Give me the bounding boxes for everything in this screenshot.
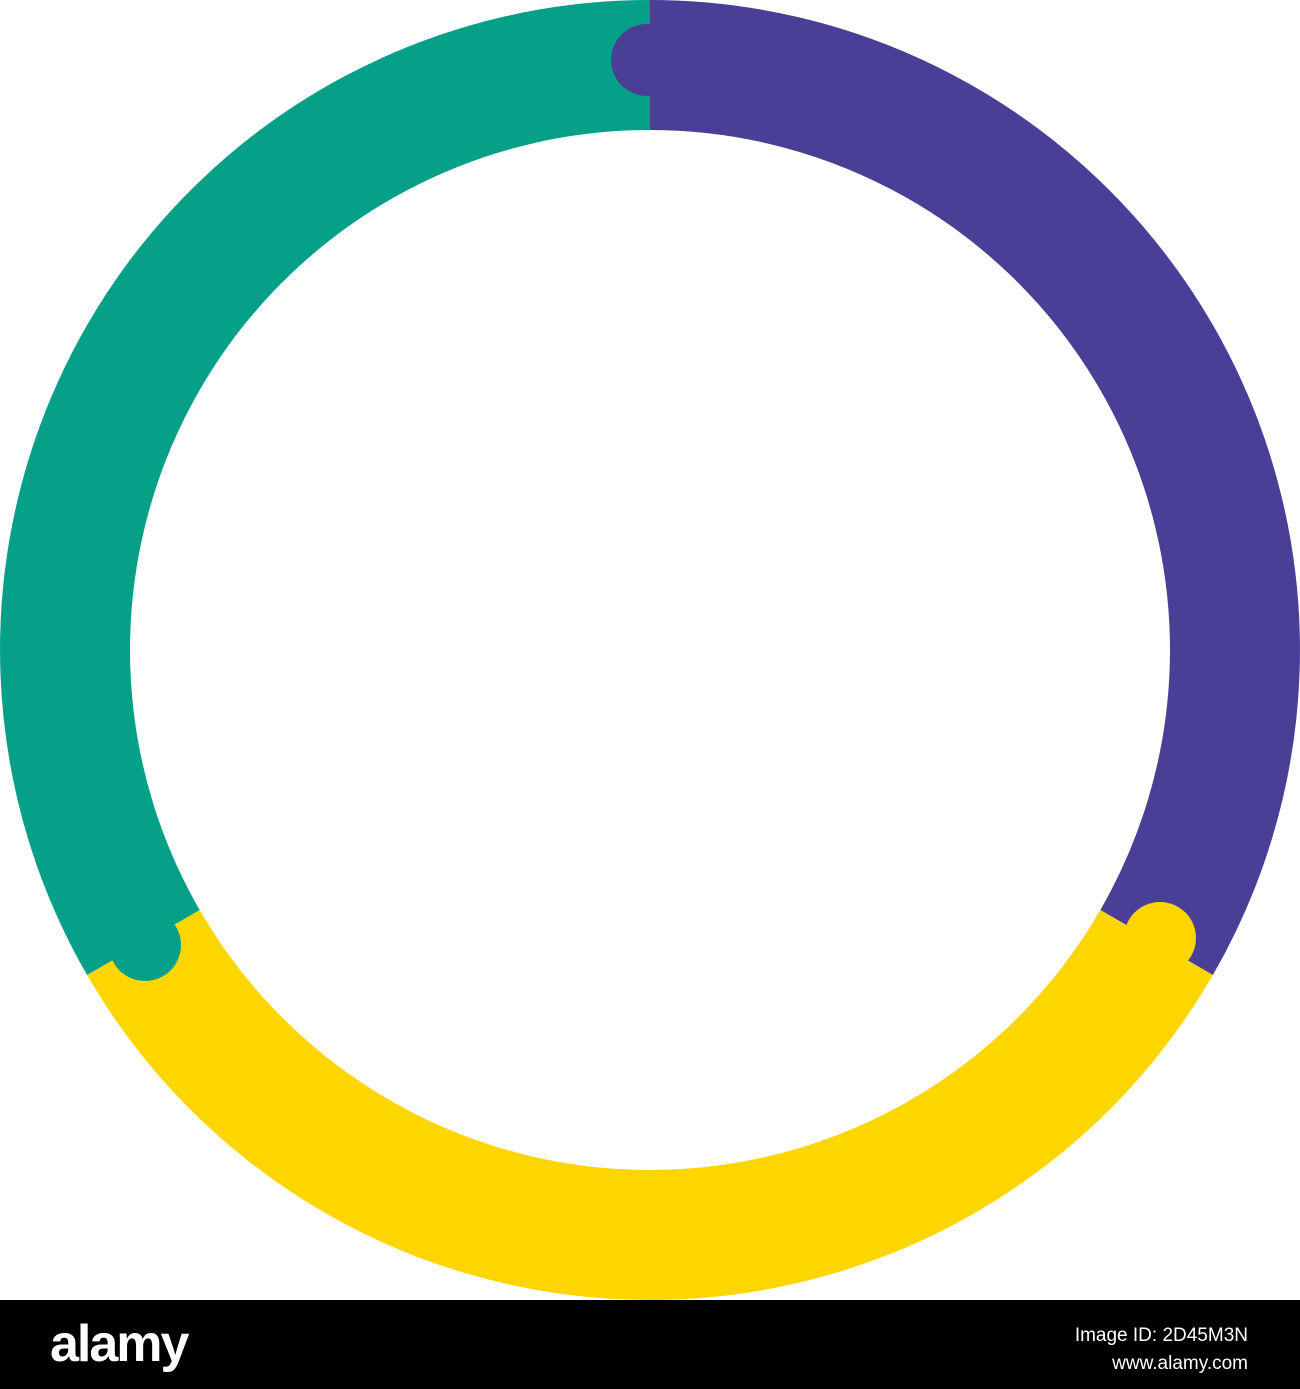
segment: purple xyxy=(650,65,1235,942)
segment: green xyxy=(65,65,650,942)
puzzle tab: left green xyxy=(109,909,181,981)
footer info xyxy=(1075,1325,1248,1374)
footer logo: alamy xyxy=(50,1315,187,1373)
puzzle tab: top purple xyxy=(611,24,683,96)
puzzle tab: right yellow xyxy=(1124,902,1196,974)
segment: yellow xyxy=(143,942,1157,1235)
footer info: Image ID: 2D45M3N xyxy=(1075,1325,1248,1346)
footer bar xyxy=(0,1300,1300,1389)
footer info: www.alamy.com xyxy=(1112,1353,1248,1374)
